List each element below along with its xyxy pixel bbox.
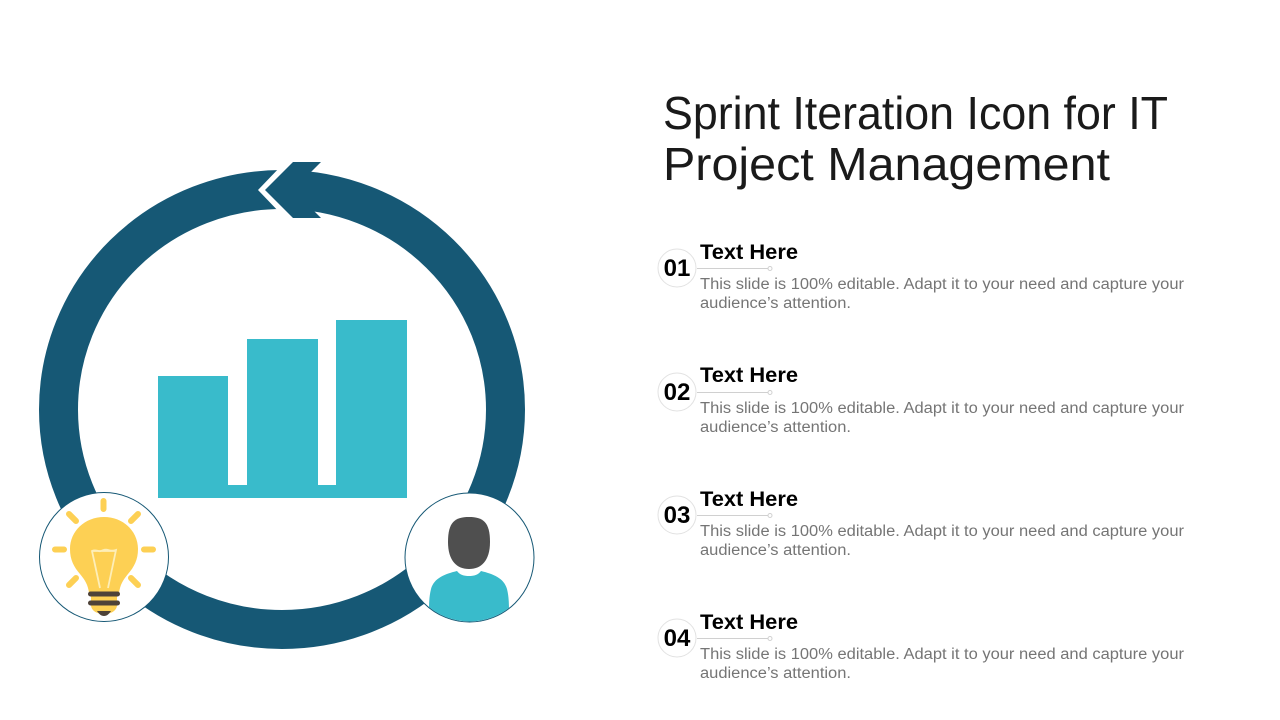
list item 04: 04 (664, 625, 691, 652)
icon: light bulb (40, 492, 168, 622)
list item 04: audience’s attention. (700, 665, 851, 682)
list item 01: This slide is 100% editable. Adapt it to your need and capture your (700, 276, 1184, 293)
title: Sprint Iteration Icon for IT (663, 87, 1168, 139)
circular arrow (58, 160, 506, 630)
list item 01: 01 (664, 255, 690, 282)
list item 02: Text Here (700, 364, 798, 387)
title (663, 87, 1168, 190)
list item 02 (658, 364, 1184, 436)
list item 03 (658, 488, 1184, 559)
list item 01: Text Here (700, 241, 798, 264)
list item 02: audience’s attention. (700, 419, 851, 436)
list item 03: This slide is 100% editable. Adapt it to your need and capture your (700, 523, 1184, 540)
list item 01: audience’s attention. (700, 295, 851, 312)
title: Project Management (663, 138, 1110, 190)
list item 03: 03 (664, 502, 690, 529)
list item 03: Text Here (700, 488, 798, 511)
list item 04: This slide is 100% editable. Adapt it to your need and capture your (700, 646, 1184, 663)
list item 01 (658, 241, 1184, 312)
list item 02: This slide is 100% editable. Adapt it to your need and capture your (700, 400, 1184, 417)
list item 04 (658, 611, 1184, 682)
list item 03: audience’s attention. (700, 542, 851, 559)
bar chart (158, 320, 407, 498)
list item 04: Text Here (700, 611, 798, 634)
list item 02: 02 (664, 379, 690, 406)
icon: person (405, 493, 534, 625)
